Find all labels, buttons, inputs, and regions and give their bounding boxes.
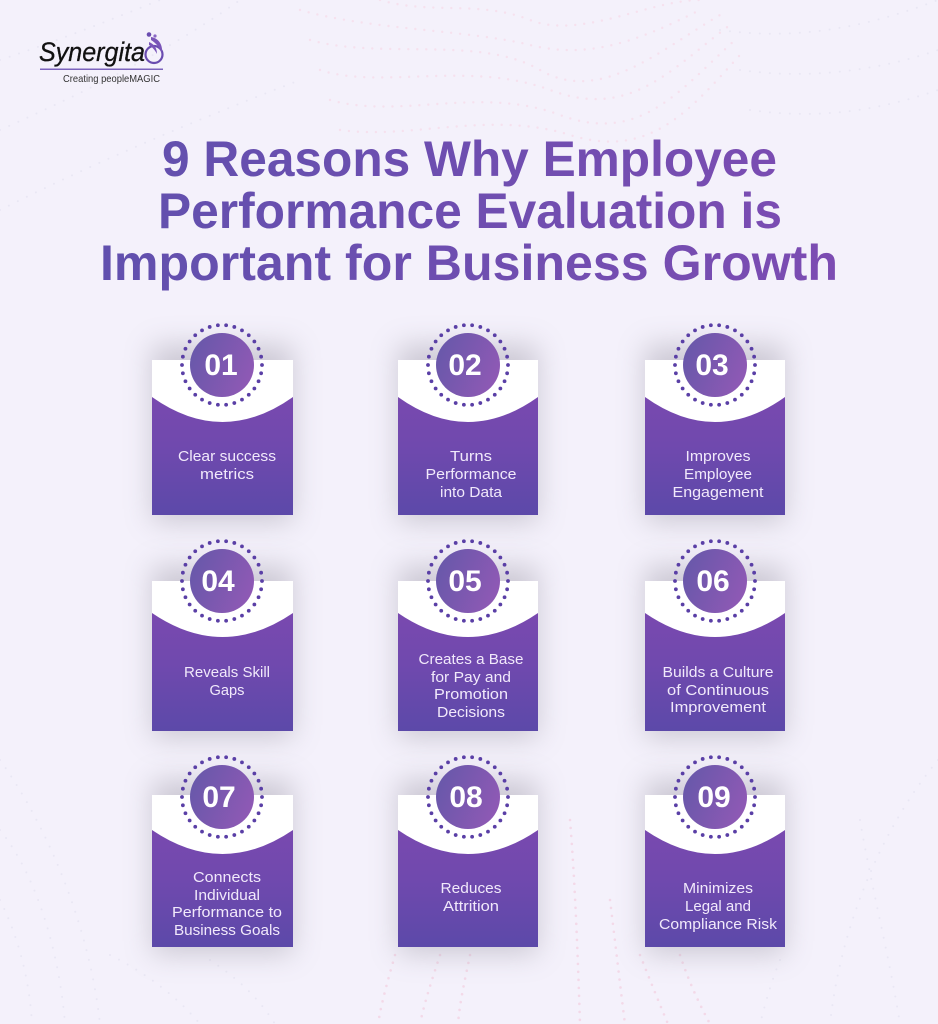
label [426, 449, 516, 501]
label [184, 665, 270, 699]
number badge 03: 03 [695, 349, 729, 382]
label: Individual [194, 888, 260, 904]
card 09: Minimizes Legal and Compliance Risk [645, 757, 785, 954]
label [178, 449, 276, 483]
number badge 01: 01 [204, 349, 238, 382]
number badge 02 [428, 325, 508, 405]
title: Important for Business Growth [100, 235, 838, 291]
label: Performance [426, 467, 516, 483]
number badge 03 [675, 325, 755, 405]
title: 9 Reasons Why Employee [162, 131, 777, 187]
label: Builds a Culture [662, 665, 774, 681]
label: Clear success [178, 449, 276, 465]
logo wordmark: Synergita [39, 37, 145, 67]
card 04: Reveals Skill Gaps [152, 541, 293, 738]
number badge 02: 02 [448, 349, 482, 382]
card 03: Improves Employee Engagement [645, 325, 785, 522]
label: into Data [440, 485, 503, 501]
label: Engagement [672, 485, 764, 501]
label: Performance to [172, 905, 282, 921]
label [172, 870, 282, 939]
card 02: Turns Performance into Data [398, 325, 538, 522]
number badge 07: 07 [202, 781, 236, 814]
number badge 06: 06 [696, 565, 730, 598]
label: Improvement [670, 700, 766, 716]
card 08: Reduces Attrition [398, 757, 538, 954]
number badge 07 [182, 757, 262, 837]
card 07: Connects Individual Performance to Business Goals [152, 757, 293, 954]
number badge 06 [675, 541, 755, 621]
number badge 08: 08 [449, 781, 483, 814]
card 06: Builds a Culture of Continuous Improvement [645, 541, 785, 738]
number badge 09 [675, 757, 755, 837]
card 05: Creates a Base for Pay and Promotion Decisions [398, 541, 538, 738]
logo icon [146, 32, 162, 63]
card 01: Clear success metrics [152, 325, 293, 522]
label: Reveals Skill [184, 665, 270, 681]
label [672, 449, 764, 501]
number badge 05 [428, 541, 508, 621]
number badge 04 [182, 541, 262, 621]
title [100, 131, 838, 291]
label: of Continuous [667, 683, 769, 699]
logo tagline: Creating peopleMAGIC [63, 73, 160, 85]
number badge 01 [182, 325, 262, 405]
label: Compliance Risk [659, 917, 778, 933]
label [659, 881, 778, 933]
label: Promotion [434, 687, 508, 703]
label: Improves [686, 449, 750, 465]
label: for Pay and [431, 670, 511, 686]
logo: Synergita [39, 32, 163, 85]
label [418, 652, 524, 721]
number badge 08 [428, 757, 508, 837]
title: Performance Evaluation is [158, 183, 782, 239]
number badge 04: 04 [201, 565, 235, 598]
label: Minimizes [683, 881, 753, 897]
label: Connects [193, 870, 261, 886]
number badge 05: 05 [448, 565, 482, 598]
label: Business Goals [174, 923, 280, 939]
label: Legal and [685, 899, 751, 915]
label: Creates a Base [418, 652, 524, 668]
label [662, 665, 774, 716]
label: Turns [450, 449, 492, 465]
label: Employee [684, 467, 752, 483]
label: Gaps [210, 683, 244, 699]
label: Attrition [443, 899, 499, 915]
label [440, 881, 502, 915]
label: Reduces [440, 881, 502, 897]
logo divider line [40, 68, 163, 70]
label: metrics [200, 467, 254, 483]
number badge 09: 09 [697, 781, 731, 814]
label: Decisions [437, 705, 505, 721]
